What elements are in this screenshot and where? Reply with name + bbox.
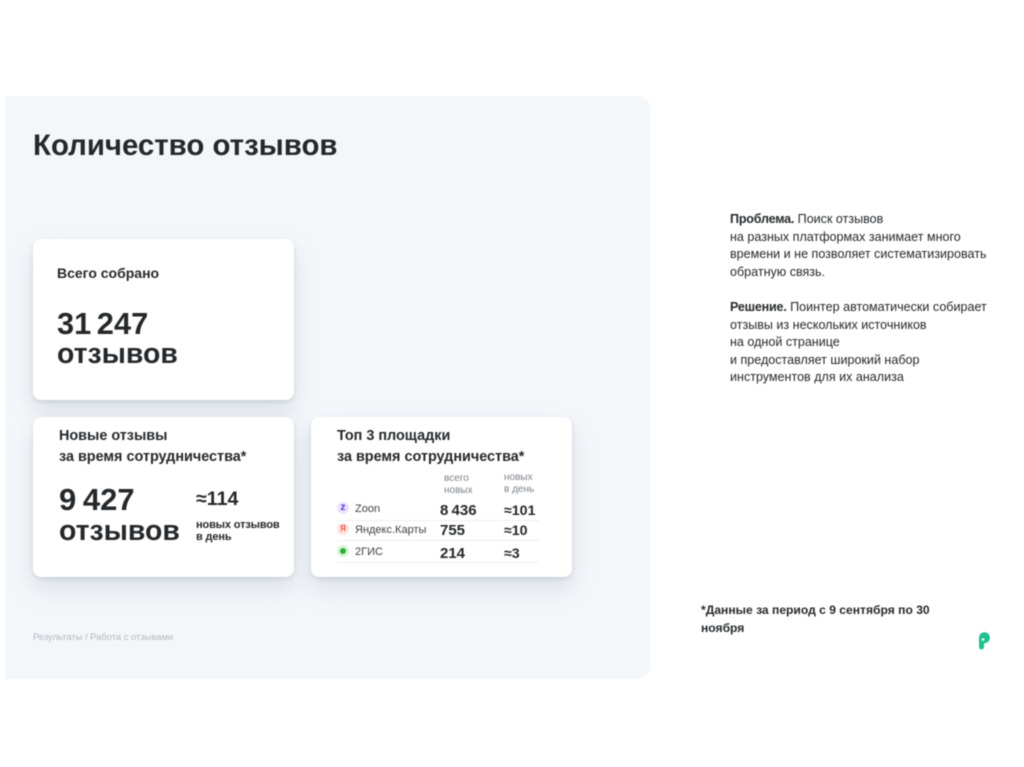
total value: 31 247 bbox=[57, 306, 148, 341]
value: 2GIS total: 214 bbox=[440, 545, 465, 562]
value: Zoon total: 8 436 bbox=[440, 502, 477, 519]
panel: total collected card bbox=[33, 239, 294, 400]
column header: new per day: в день bbox=[504, 484, 534, 495]
panel: top 3 platforms card bbox=[311, 417, 572, 577]
icon: Zoon bbox=[337, 502, 349, 514]
card heading: top 3 bbox=[336, 428, 525, 465]
text block: problem bbox=[730, 212, 987, 280]
title: Количество отзывов bbox=[33, 129, 337, 162]
panel: new reviews card bbox=[33, 417, 294, 577]
text block: problem: Проблема. Поиск отзывов bbox=[730, 212, 883, 226]
column header: new per day bbox=[504, 472, 534, 495]
card heading: new reviews: за время сотрудничества* bbox=[59, 448, 246, 464]
icon: 2GIS bbox=[337, 545, 349, 557]
per day caption: новых отзывов bbox=[196, 519, 280, 531]
icon: logo bbox=[978, 632, 991, 650]
column header: new per day: новых bbox=[504, 472, 533, 483]
card heading: new reviews bbox=[58, 428, 247, 465]
icon: Yandex bbox=[337, 523, 349, 535]
card heading: new reviews: Новые отзывы bbox=[59, 428, 167, 444]
total unit: отзывов bbox=[57, 338, 178, 370]
per day caption: в день bbox=[196, 531, 231, 543]
text block: problem: обратную связь. bbox=[730, 265, 825, 279]
per day value: ≈114 bbox=[196, 488, 238, 510]
value: Yandex per day: ≈10 bbox=[504, 523, 528, 539]
value: Zoon per day: ≈101 bbox=[504, 503, 535, 519]
column header: total new: новых bbox=[444, 485, 473, 496]
value: Yandex total: 755 bbox=[440, 522, 465, 539]
column header: total new: всего bbox=[444, 473, 469, 484]
platform name: Zoon: Zoon bbox=[355, 503, 380, 515]
card heading: top 3: за время сотрудничества* bbox=[337, 448, 524, 464]
text block: solution: и предоставляет широкий набор bbox=[730, 353, 919, 367]
row: Yandex Maps bbox=[336, 522, 528, 539]
column header: total new bbox=[444, 473, 473, 496]
row: Zoon bbox=[336, 502, 536, 519]
icon: Zoon: z bbox=[340, 502, 346, 513]
new reviews value: 9 427 bbox=[59, 482, 135, 517]
platform name: Yandex Maps: Яндекс.Карты bbox=[355, 524, 426, 536]
footnote: ноября bbox=[701, 621, 744, 635]
text block: solution: Решение. Поинтер автоматически собирает bbox=[730, 300, 987, 314]
new reviews unit: отзывов bbox=[59, 515, 180, 547]
text block: solution: инструментов для их анализа bbox=[730, 370, 904, 384]
breadcrumb footer: Результаты / Работа с отзывами bbox=[33, 631, 173, 642]
panel: slide background bbox=[5, 96, 650, 679]
icon: Yandex: Я bbox=[340, 524, 346, 533]
text block: solution: отзывы из нескольких источников bbox=[730, 318, 927, 332]
text block: problem: на разных платформах занимает много bbox=[730, 230, 961, 244]
card label: total collected: Всего собрано bbox=[57, 265, 159, 281]
text block: solution: на одной странице bbox=[730, 335, 840, 349]
card heading: top 3: Топ 3 площадки bbox=[337, 428, 450, 444]
footnote bbox=[700, 603, 930, 636]
platform name: 2GIS: 2ГИС bbox=[355, 546, 383, 558]
text block: solution bbox=[730, 300, 988, 384]
value: 2GIS per day: ≈3 bbox=[504, 546, 520, 562]
per day caption bbox=[196, 519, 280, 544]
text block: problem: времени и не позволяет систематизировать bbox=[730, 247, 987, 261]
footnote: *Данные за период с 9 сентября по 30 bbox=[701, 603, 930, 617]
row: 2GIS bbox=[336, 544, 520, 562]
